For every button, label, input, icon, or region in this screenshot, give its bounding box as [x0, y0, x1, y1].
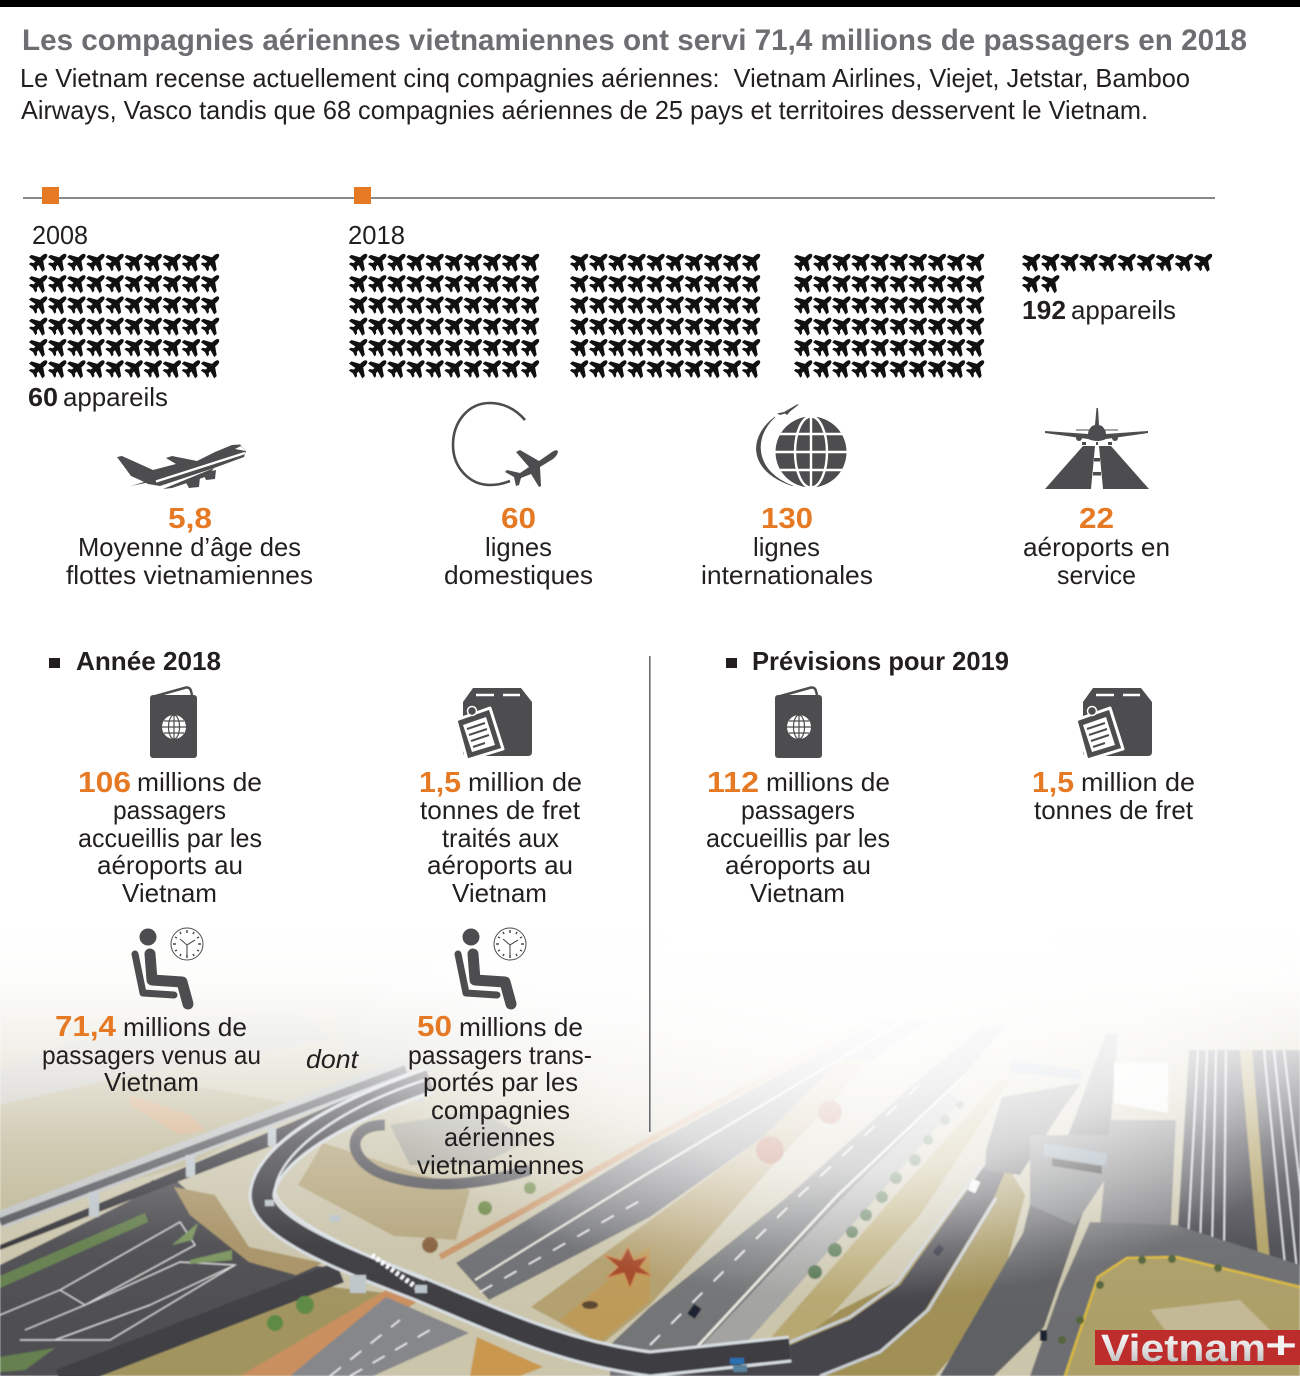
stat: 112 million passengers: accueillis par les: [706, 823, 890, 853]
icon: passport: [150, 687, 197, 758]
stat: airports: aéroports en: [1023, 532, 1170, 562]
stat: 1.5 million tonnes: traités aux: [442, 823, 559, 853]
panel: fleet 2018: [345, 220, 1218, 382]
icon: seated passenger and clock: [135, 928, 203, 1004]
background photo: airport expressway interchange: [0, 930, 1300, 1376]
logo: Vietnam+: +: [1265, 1325, 1297, 1367]
icon: airliner: [117, 444, 246, 489]
stat: 1.5 million tonnes: million de: [468, 767, 582, 797]
divider: [649, 656, 651, 1132]
intro text: Airways, Vasco tandis que 68 compagnies aériennes de 25 pays et territoires desservent le Vietnam.: [21, 95, 1148, 125]
stat: 50 million passengers: 50: [417, 1011, 452, 1043]
stat: 50 million passengers: aériennes: [444, 1122, 555, 1152]
stat: average age: Moyenne d’âge des: [78, 532, 301, 562]
stat: 112 million passengers: [706, 767, 890, 908]
stat: 71.4 million passengers: 71,4: [55, 1011, 116, 1043]
year 2008: 2008: [32, 220, 88, 250]
stat: 71.4 million passengers: passagers venus au: [42, 1040, 261, 1070]
heading: year 2018: Année 2018: [76, 646, 221, 676]
stat: average age: flottes vietnamiennes: [66, 560, 313, 590]
stat: international routes: [701, 503, 873, 590]
stat: 50 million passengers: compagnies: [431, 1095, 570, 1125]
stat: 106 million passengers: millions de: [137, 767, 262, 797]
icon: plane over runway: [1045, 408, 1149, 489]
icon: cargo box: [456, 688, 532, 760]
intro text: Le Vietnam recense actuellement cinq compagnies aériennes: Vietnam Airlines, Viejet, Jetstar, Bamboo: [20, 63, 1190, 93]
stat: 112 million passengers: Vietnam: [750, 878, 845, 908]
stat: 106 million passengers: Vietnam: [122, 878, 217, 908]
pictogram: 192 planes: [345, 247, 1218, 382]
stat: average age: 5,8: [168, 503, 212, 535]
stat: airports: service: [1057, 560, 1136, 590]
icon: globe with plane: [756, 404, 847, 488]
stat: 1.5 million tonnes: Vietnam: [452, 878, 547, 908]
stat: 112 million passengers: 112: [707, 767, 759, 799]
stat: 50 million passengers: vietnamiennes: [417, 1150, 584, 1180]
year 2018: 2018: [348, 220, 405, 250]
stat: international routes: 130: [761, 503, 813, 535]
stat: 112 million passengers: aéroports au: [725, 850, 871, 880]
stat: domestic routes: [444, 503, 593, 590]
icon: seated passenger and clock 2: [458, 928, 526, 1004]
192 aircraft label: [1022, 295, 1176, 325]
stat: 1.5 million tonnes: 1,5: [419, 767, 461, 799]
60 aircraft label: appareils: [63, 382, 168, 412]
stat: 50 million passengers: millions de: [459, 1012, 583, 1042]
photo haze overlay: [0, 720, 1300, 1325]
stat: 106 million passengers: aéroports au: [97, 850, 243, 880]
pictogram: 60 planes: [25, 247, 225, 382]
timeline: [23, 187, 1215, 204]
stat: 50 million passengers: [408, 1011, 592, 1180]
stat: 106 million passengers: accueillis par les: [78, 823, 262, 853]
stat: 50 million passengers: passagers trans-: [408, 1040, 592, 1070]
stat: airports: 22: [1079, 503, 1114, 535]
logo: Vietnam+: Vietnam: [1101, 1328, 1266, 1370]
title: Les compagnies aériennes vietnamiennes ont servi 71,4 millions de passagers en 2018: [22, 24, 1247, 57]
stat: average age: [66, 503, 313, 590]
192 aircraft label: 192: [1022, 295, 1066, 325]
panel: fleet 2008: [25, 220, 225, 412]
heading: forecast 2019: Prévisions pour 2019: [752, 646, 1009, 676]
stat: 1.5 million tonnes 2019: million de: [1081, 767, 1195, 797]
stat: domestic routes: lignes: [485, 532, 552, 562]
stat: 71.4 million passengers: [42, 1011, 261, 1097]
top black bar: [0, 0, 1300, 7]
stat: 1.5 million tonnes 2019: tonnes de fret: [1034, 795, 1194, 825]
icon: passport 2019: [775, 687, 822, 758]
stat: 106 million passengers: 106: [78, 767, 131, 799]
stat: 1.5 million tonnes: [419, 767, 582, 908]
stat: domestic routes: 60: [501, 503, 536, 535]
stat: 106 million passengers: passagers: [113, 795, 226, 825]
stat: domestic routes: domestiques: [444, 560, 593, 590]
stat: 1.5 million tonnes: tonnes de fret: [420, 795, 581, 825]
stat: 106 million passengers: [78, 767, 262, 908]
stat: 112 million passengers: passagers: [741, 795, 855, 825]
word: dont: dont: [306, 1044, 360, 1074]
stat: 71.4 million passengers: millions de: [123, 1012, 247, 1042]
stat: airports: [1023, 503, 1170, 590]
stat: 71.4 million passengers: Vietnam: [104, 1067, 199, 1097]
stat: 1.5 million tonnes 2019: 1,5: [1032, 767, 1074, 799]
icon: plane circling: [453, 403, 558, 487]
stat: international routes: lignes: [753, 532, 820, 562]
60 aircraft label: 60: [28, 382, 58, 412]
stat: international routes: internationales: [701, 560, 873, 590]
stat: 1.5 million tonnes 2019: [1032, 767, 1195, 825]
logo: Vietnam+: [1095, 1325, 1300, 1370]
stat: 112 million passengers: millions de: [766, 767, 890, 797]
stat: 1.5 million tonnes: aéroports au: [427, 850, 573, 880]
192 aircraft label: appareils: [1071, 295, 1176, 325]
icon: cargo box 2019: [1076, 688, 1152, 760]
intro text: [20, 63, 1190, 125]
stat: 50 million passengers: portés par les: [423, 1067, 578, 1097]
